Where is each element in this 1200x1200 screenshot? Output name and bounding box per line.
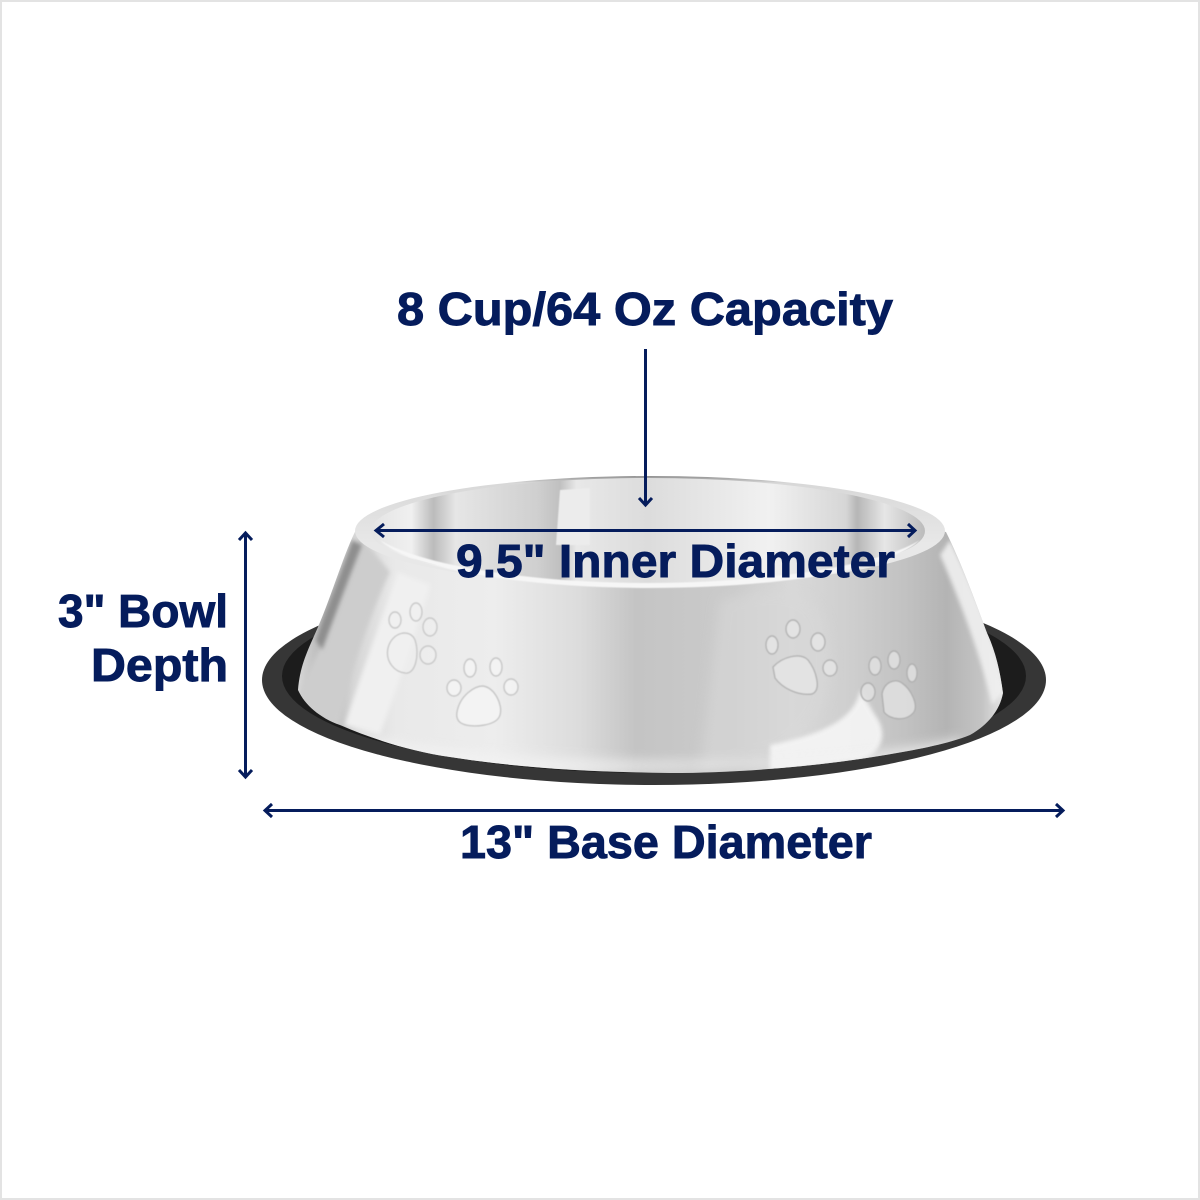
arrow: capacity pointer xyxy=(639,349,652,505)
label: inner diameter: 9.5" Inner Diameter xyxy=(456,535,895,587)
bowl photo xyxy=(262,476,1046,785)
label: base diameter: 13" Base Diameter xyxy=(460,816,872,868)
arrow: base diameter xyxy=(265,804,1063,817)
rubber base ring xyxy=(262,575,1046,785)
arrow: inner diameter xyxy=(376,524,915,537)
rim xyxy=(355,476,945,586)
steel bowl outer wall xyxy=(298,480,1003,773)
label: bowl depth: Depth xyxy=(91,639,228,691)
paw print 3 xyxy=(766,620,837,694)
label: bowl depth xyxy=(58,585,228,691)
paw print 2 xyxy=(447,658,518,726)
arrow: bowl depth xyxy=(239,533,252,777)
heading: capacity: 8 Cup/64 Oz Capacity xyxy=(397,283,893,335)
bowl interior xyxy=(371,478,925,588)
paw print 4 xyxy=(861,651,917,719)
wall reflections xyxy=(296,535,1004,780)
label: bowl depth: 3" Bowl xyxy=(58,585,228,637)
paw print 1 xyxy=(387,603,437,673)
